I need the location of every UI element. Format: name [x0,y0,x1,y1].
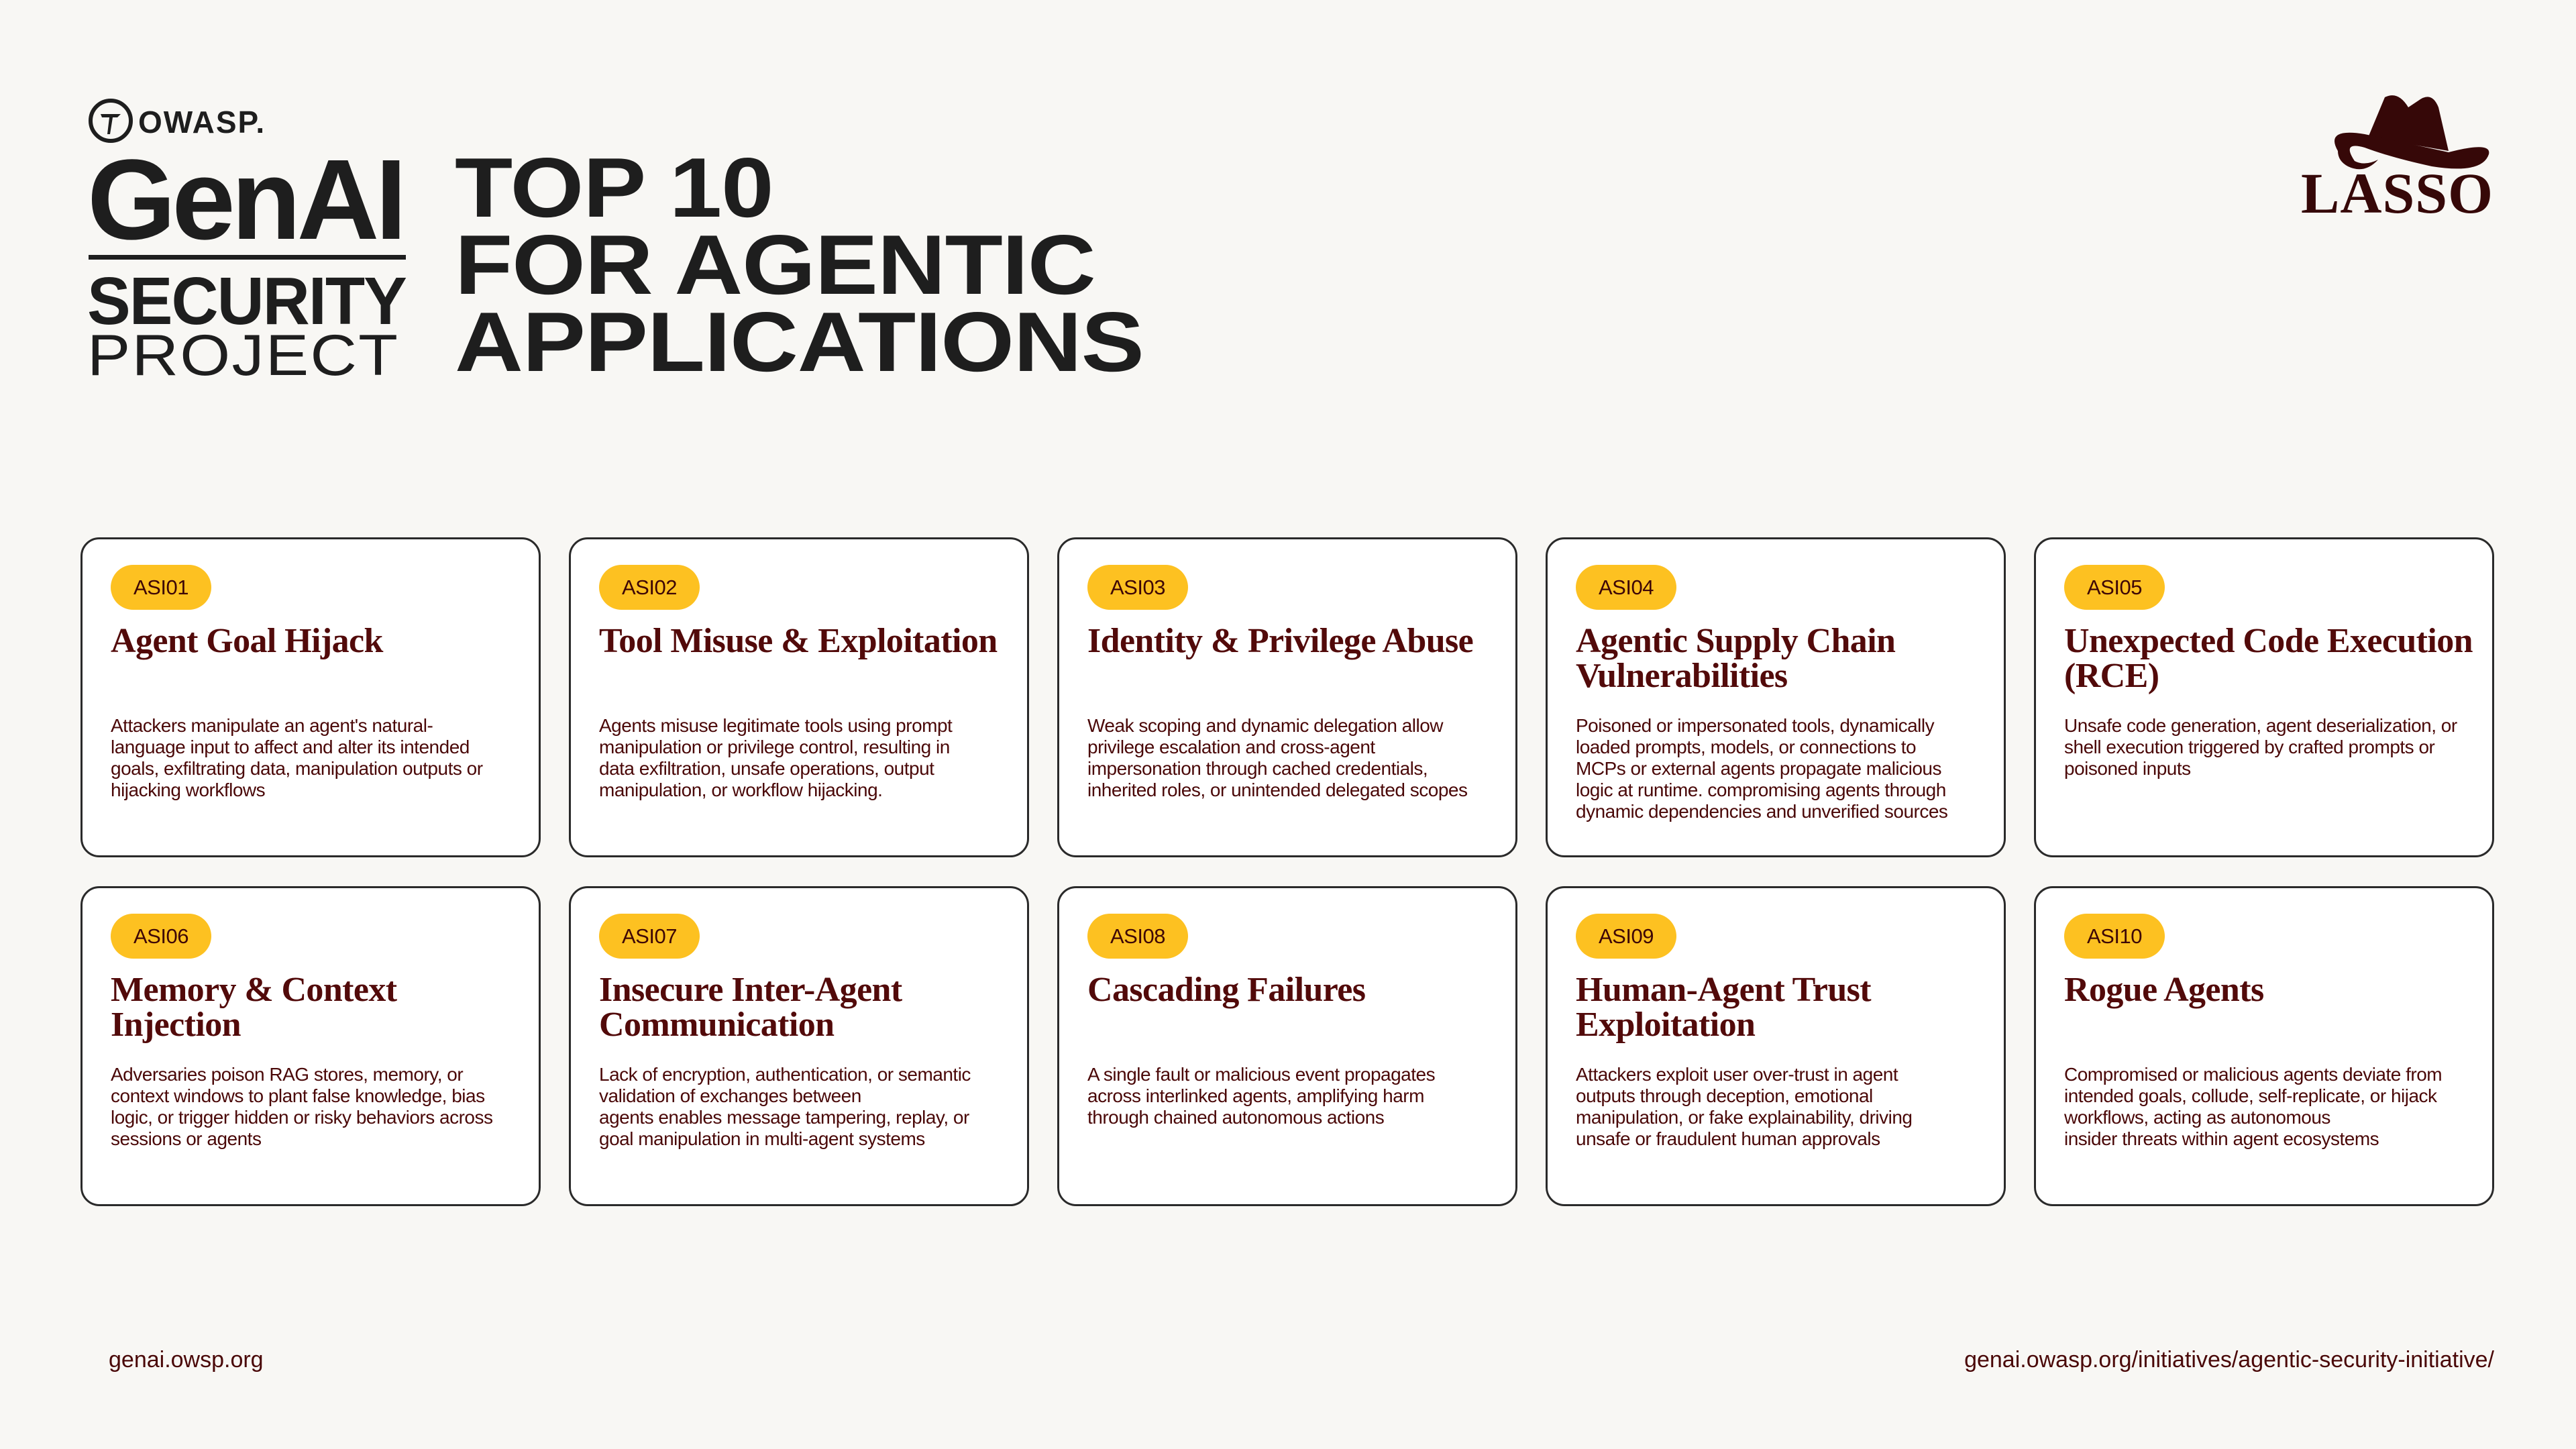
logo: lasso [2301,95,2493,225]
card: ASI02: ASI02 [622,576,677,599]
card: ASI01 [80,537,541,857]
card: ASI04: ASI04 [1599,576,1654,599]
card: ASI04: Agentic Supply Chain [1576,622,1895,660]
card: ASI01: language input to affect and alter its intended [111,737,470,757]
card: ASI05: Unsafe code generation, agent deserialization, or [2064,715,2457,736]
card: ASI07: ASI07 [622,924,677,948]
card: ASI06: context windows to plant false knowledge, bias [111,1085,485,1106]
card: ASI10: intended goals, collude, self-replicate, or hijack [2064,1085,2437,1106]
card: ASI06: sessions or agents [111,1128,261,1149]
card: ASI03: Weak scoping and dynamic delegation allow [1087,715,1443,736]
card: ASI09: Exploitation [1576,1006,1755,1044]
card: ASI01: goals, exfiltrating data, manipulation outputs or [111,758,483,779]
card: ASI09: Human-Agent Trust [1576,971,1871,1009]
card: ASI09: Attackers exploit user over-trust in agent [1576,1064,1898,1085]
card: ASI06: Injection [111,1006,241,1044]
card: ASI02: manipulation, or workflow hijacking. [599,780,882,800]
footer: left url: genai.owsp.org [109,1347,264,1373]
title: FOR AGENTIC [455,217,1095,312]
card: ASI05: Unexpected Code Execution [2064,622,2473,660]
card: ASI07 [569,886,1029,1206]
card: ASI08: through chained autonomous actions [1087,1107,1384,1128]
card: ASI08: Cascading Failures [1087,971,1365,1009]
logo: genai security project [87,136,407,388]
card: ASI10: Compromised or malicious agents deviate from [2064,1064,2442,1085]
card: ASI10 [2034,886,2494,1206]
footer: right url: genai.owasp.org/initiatives/agentic-security-initiative/ [1964,1347,2494,1373]
card: ASI01: Agent Goal Hijack [111,622,383,660]
card: ASI08: ASI08 [1110,924,1165,948]
card: ASI07: validation of exchanges between [599,1085,861,1106]
card: ASI04 [1546,537,2006,857]
card: ASI02: manipulation or privilege control, resulting in [599,737,950,757]
card: ASI03: ASI03 [1110,576,1165,599]
card: ASI05: (RCE) [2064,657,2159,695]
card: ASI03: privilege escalation and cross-agent [1087,737,1375,757]
card: ASI02: data exfiltration, unsafe operations, output [599,758,934,779]
logo: genai security project: SECURITY [87,264,406,339]
card: ASI03: inherited roles, or unintended delegated scopes [1087,780,1467,800]
card: ASI06: ASI06 [133,924,189,948]
logo: owasp [89,99,266,143]
card: ASI09: outputs through deception, emotional [1576,1085,1873,1106]
card: ASI07: Lack of encryption, authentication, or semantic [599,1064,971,1085]
card: ASI02: Tool Misuse & Exploitation [599,622,998,660]
card: ASI08: across interlinked agents, amplifying harm [1087,1085,1424,1106]
card: ASI01: hijacking workflows [111,780,265,800]
card: ASI07: Communication [599,1006,834,1044]
card: ASI06: logic, or trigger hidden or risky behaviors across [111,1107,492,1128]
card: ASI04: logic at runtime. compromising agents through [1576,780,1946,800]
card: ASI01: ASI01 [133,576,189,599]
card: ASI04: MCPs or external agents propagate malicious [1576,758,1941,779]
title: TOP 10 [455,140,773,235]
card: ASI01: Attackers manipulate an agent's natural- [111,715,433,736]
card: ASI04: dynamic dependencies and unverified sources [1576,801,1947,822]
card: ASI08 [1057,886,1517,1206]
card: ASI07: agents enables message tampering, replay, or [599,1107,969,1128]
card: ASI06: Adversaries poison RAG stores, memory, or [111,1064,463,1085]
card: ASI10: ASI10 [2087,924,2142,948]
card: ASI05: ASI05 [2087,576,2142,599]
card: ASI03: impersonation through cached credentials, [1087,758,1428,779]
card: ASI05 [2034,537,2494,857]
card: ASI08: A single fault or malicious event propagates [1087,1064,1435,1085]
title: APPLICATIONS [455,294,1144,389]
card: ASI04: Vulnerabilities [1576,657,1788,695]
card: ASI02: Agents misuse legitimate tools using prompt [599,715,952,736]
card: ASI09: ASI09 [1599,924,1654,948]
card: ASI03: Identity & Privilege Abuse [1087,622,1473,660]
card: ASI07: Insecure Inter-Agent [599,971,902,1009]
card: ASI04: Poisoned or impersonated tools, dynamically [1576,715,1934,736]
logo: genai security project: PROJECT [87,323,399,388]
logo: owasp: OWASP. [138,105,266,140]
title [455,140,1144,389]
card: ASI05: poisoned inputs [2064,758,2191,779]
card: ASI07: goal manipulation in multi-agent systems [599,1128,925,1149]
card: ASI09: unsafe or fraudulent human approvals [1576,1128,1880,1149]
card: ASI04: loaded prompts, models, or connections to [1576,737,1916,757]
card: ASI02 [569,537,1029,857]
card: ASI06 [80,886,541,1206]
card: ASI10: workflows, acting as autonomous [2064,1107,2330,1128]
logo: genai security project: GenAI [87,136,403,264]
card: ASI10: insider threats within agent ecosystems [2064,1128,2379,1149]
card: ASI09: manipulation, or fake explainability, driving [1576,1107,1912,1128]
card: ASI05: shell execution triggered by crafted prompts or [2064,737,2434,757]
card: ASI03 [1057,537,1517,857]
logo: lasso: LASSO [2301,161,2493,225]
card: ASI10: Rogue Agents [2064,971,2264,1009]
card: ASI06: Memory & Context [111,971,396,1009]
card: ASI09 [1546,886,2006,1206]
